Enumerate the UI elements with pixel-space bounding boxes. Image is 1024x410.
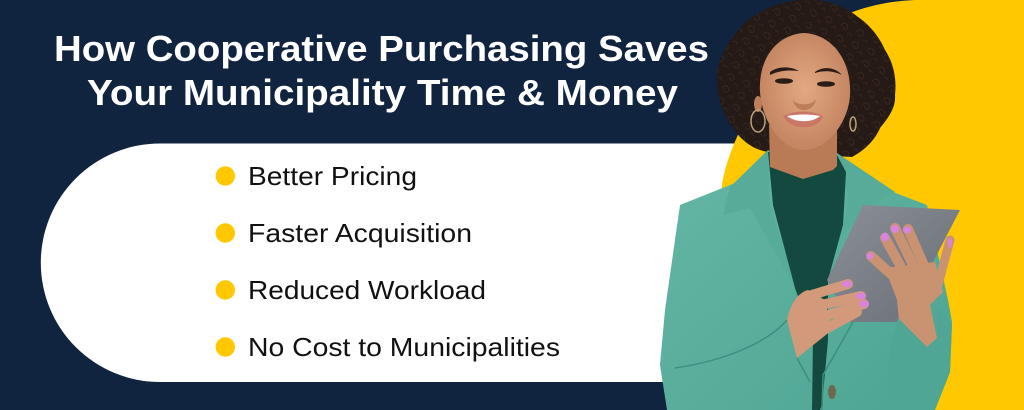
face xyxy=(760,33,850,150)
nails xyxy=(842,225,952,308)
benefits list xyxy=(216,161,560,362)
lower jacket front seam xyxy=(822,322,853,410)
right sleeve xyxy=(888,307,952,410)
left palm and wrist xyxy=(787,290,832,358)
title: How Cooperative Purchasing Saves xyxy=(54,28,709,69)
woman holding a tablet xyxy=(660,0,960,410)
yellow background shape xyxy=(716,0,1024,410)
turtleneck xyxy=(768,152,846,410)
smile xyxy=(783,112,823,127)
lapel right xyxy=(837,153,895,235)
white pill panel xyxy=(41,144,760,382)
tablet xyxy=(827,205,960,322)
right palm and wrist xyxy=(885,262,943,347)
hair xyxy=(717,0,896,157)
jacket xyxy=(660,150,952,410)
right hand xyxy=(871,228,950,285)
nose xyxy=(793,99,816,110)
item: reduced workload: Reduced Workload xyxy=(248,275,486,305)
left ear xyxy=(754,96,762,112)
left hand xyxy=(805,284,864,332)
item: faster acquisition: Faster Acquisition xyxy=(248,218,472,248)
button xyxy=(828,385,836,399)
earrings xyxy=(751,110,856,132)
neck xyxy=(769,125,837,179)
item: better pricing: Better Pricing xyxy=(248,161,417,191)
eyebrows and eyes xyxy=(770,67,842,87)
title xyxy=(54,28,709,113)
left sleeve seam xyxy=(675,320,810,382)
item: no cost to municipalities: No Cost to Municipalities xyxy=(248,332,560,362)
title: Your Municipality Time & Money xyxy=(87,72,678,113)
lapel left xyxy=(723,150,812,338)
